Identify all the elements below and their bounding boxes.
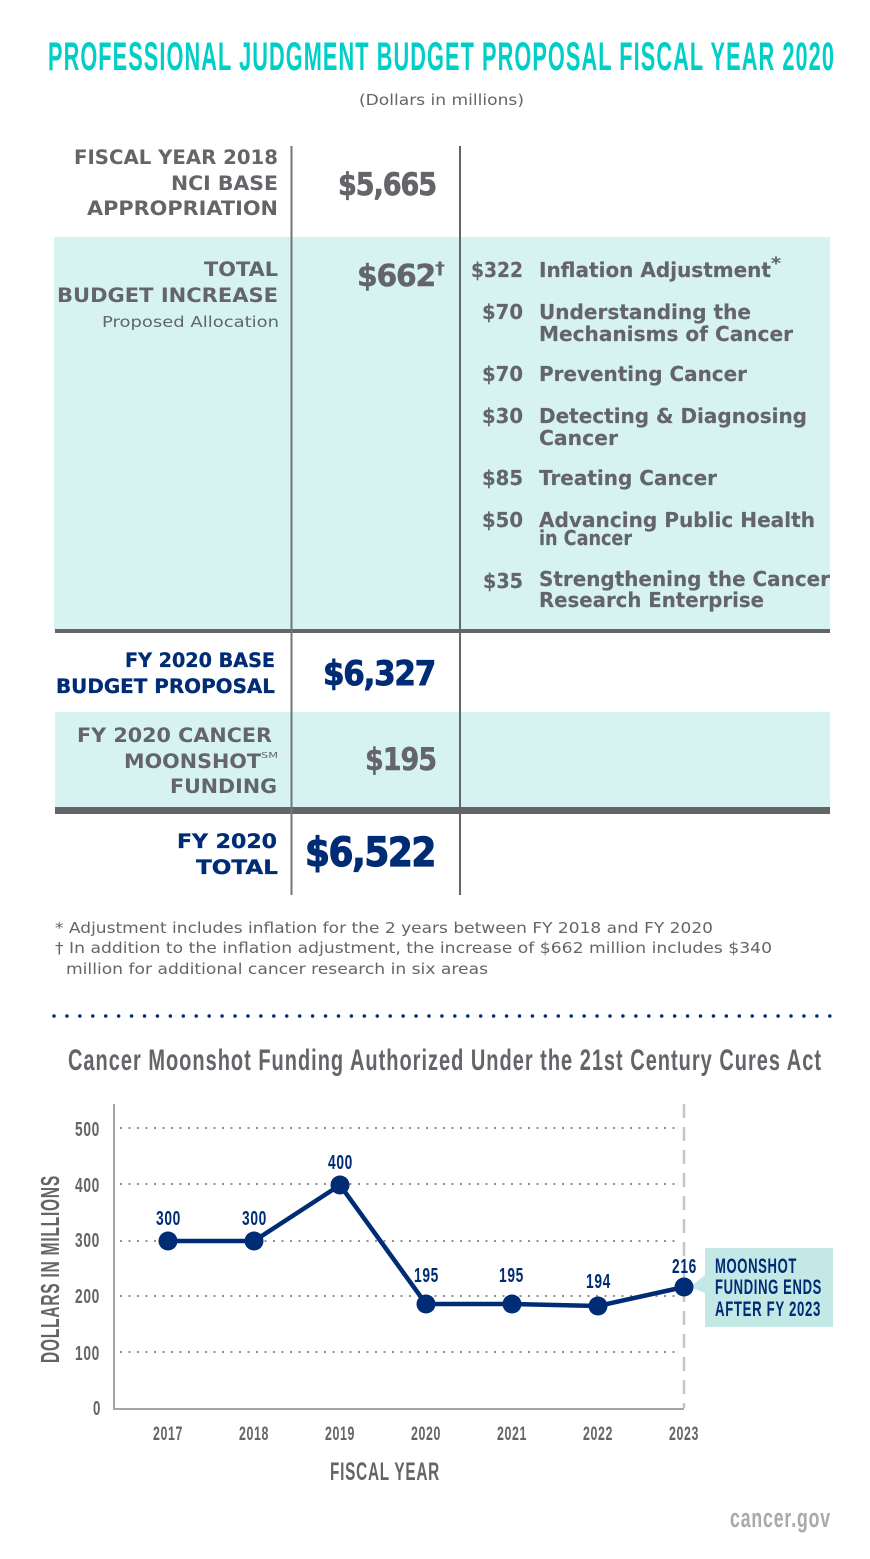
x axis tick labels <box>153 1424 699 1445</box>
data value labels: 194 <box>586 1271 611 1293</box>
allocation list: Understanding the <box>539 300 751 324</box>
data value labels: 195 <box>414 1265 439 1287</box>
rule: base budget <box>55 629 830 633</box>
x axis tick labels: 2021 <box>497 1424 527 1445</box>
row: FY 2020 total: FY 2020 <box>177 830 277 853</box>
y axis tick labels: 300 <box>75 1230 100 1252</box>
x axis tick labels: 2022 <box>583 1424 613 1445</box>
data value labels: 195 <box>499 1265 524 1287</box>
callout: moonshot funding ends: MOONSHOT <box>715 1255 797 1278</box>
allocation list: Preventing Cancer <box>539 362 747 386</box>
y axis tick labels: 100 <box>75 1343 100 1365</box>
y axis tick labels: 0 <box>93 1398 101 1420</box>
data value labels: 400 <box>328 1152 353 1174</box>
row: FY 2020 total: $6,522 <box>305 830 435 876</box>
row: FY 2020 total <box>177 830 435 879</box>
row: total budget increase: BUDGET INCREASE <box>57 284 278 307</box>
grid lines <box>120 1128 680 1352</box>
x axis tick labels: 2023 <box>669 1424 699 1445</box>
line chart <box>35 1104 833 1486</box>
footnotes: million for additional cancer research in six areas <box>66 960 488 978</box>
row: FY 2018 base appropriation: $5,665 <box>338 167 436 203</box>
allocation list: Inflation Adjustment <box>539 258 771 282</box>
row: moonshot funding: MOONSHOT <box>124 750 262 773</box>
row: moonshot funding: SM <box>261 751 278 760</box>
data points <box>158 1176 694 1316</box>
allocation list: * <box>771 254 781 274</box>
allocation list: Cancer <box>539 426 618 450</box>
allocation list: Advancing Public Health <box>539 508 815 532</box>
row: FY 2018 base appropriation <box>74 146 436 220</box>
row: moonshot funding: FUNDING <box>170 775 277 798</box>
row: moonshot funding: $195 <box>365 742 436 778</box>
subtitle: (Dollars in millions) <box>359 91 524 109</box>
allocation list: $322 <box>471 258 523 282</box>
row: total budget increase: † <box>435 259 445 279</box>
row: FY 2020 base budget proposal <box>56 649 435 698</box>
y axis tick labels: 500 <box>75 1119 100 1141</box>
row: FY 2020 base budget proposal: FY 2020 BASE <box>125 649 275 672</box>
data line <box>168 1185 684 1306</box>
axes <box>114 1104 684 1409</box>
allocation list: Strengthening the Cancer <box>539 567 830 591</box>
data value labels: 216 <box>672 1256 697 1278</box>
end-of-funding dashed marker <box>683 1104 685 1408</box>
y axis tick labels: 400 <box>75 1175 100 1197</box>
row: total budget increase <box>57 258 445 331</box>
allocation list: Mechanisms of Cancer <box>539 322 793 346</box>
data value labels <box>156 1152 697 1293</box>
allocation list: $70 <box>482 362 523 386</box>
allocation list <box>471 254 830 612</box>
band: total budget increase <box>54 237 830 630</box>
row: moonshot funding <box>77 724 436 798</box>
row: FY 2020 base budget proposal: BUDGET PROPOSAL <box>56 675 275 698</box>
allocation list: $50 <box>482 508 523 532</box>
rule: total <box>55 807 830 814</box>
row: total budget increase: TOTAL <box>204 258 278 281</box>
x axis tick labels: 2017 <box>153 1424 183 1445</box>
x axis tick labels: 2018 <box>239 1424 269 1445</box>
allocation list: Research Enterprise <box>539 588 764 612</box>
footnotes <box>55 919 772 978</box>
allocation list: $70 <box>482 300 523 324</box>
panel: budget table <box>54 146 830 895</box>
x axis tick labels: 2019 <box>325 1424 355 1445</box>
row: moonshot funding: FY 2020 CANCER <box>77 724 272 747</box>
column divider right <box>459 146 461 895</box>
x axis title: FISCAL YEAR <box>330 1458 440 1486</box>
row: FY 2018 base appropriation: APPROPRIATION <box>87 197 278 220</box>
allocation list: Detecting & Diagnosing <box>539 404 807 428</box>
row: total budget increase: Proposed Allocation <box>102 313 279 331</box>
row: total budget increase: $662 <box>357 259 435 294</box>
allocation list: $85 <box>482 466 523 490</box>
column divider left <box>290 146 292 895</box>
allocation list: Treating Cancer <box>539 466 717 490</box>
footnotes: † In addition to the inflation adjustment, the increase of $662 million includes $340 <box>55 939 772 957</box>
allocation list: $35 <box>483 569 523 593</box>
row: FY 2018 base appropriation: FISCAL YEAR 2018 <box>74 146 278 169</box>
footnotes: * Adjustment includes inflation for the 2 years between FY 2018 and FY 2020 <box>55 919 713 937</box>
row: FY 2020 base budget proposal: $6,327 <box>323 654 435 694</box>
callout: moonshot funding ends <box>690 1248 833 1327</box>
row: FY 2020 total: TOTAL <box>196 856 278 879</box>
y axis tick labels: 200 <box>75 1286 100 1308</box>
band: moonshot funding <box>55 712 830 808</box>
data value labels: 300 <box>242 1208 267 1230</box>
y axis title: DOLLARS IN MILLIONS <box>35 1175 65 1363</box>
row: FY 2018 base appropriation: NCI BASE <box>171 172 278 195</box>
dotted separator <box>54 1014 830 1018</box>
data value labels: 300 <box>156 1208 181 1230</box>
allocation list: $30 <box>482 404 523 428</box>
x axis tick labels: 2020 <box>411 1424 441 1445</box>
allocation list: in Cancer <box>539 526 632 550</box>
y axis tick labels <box>75 1119 101 1420</box>
